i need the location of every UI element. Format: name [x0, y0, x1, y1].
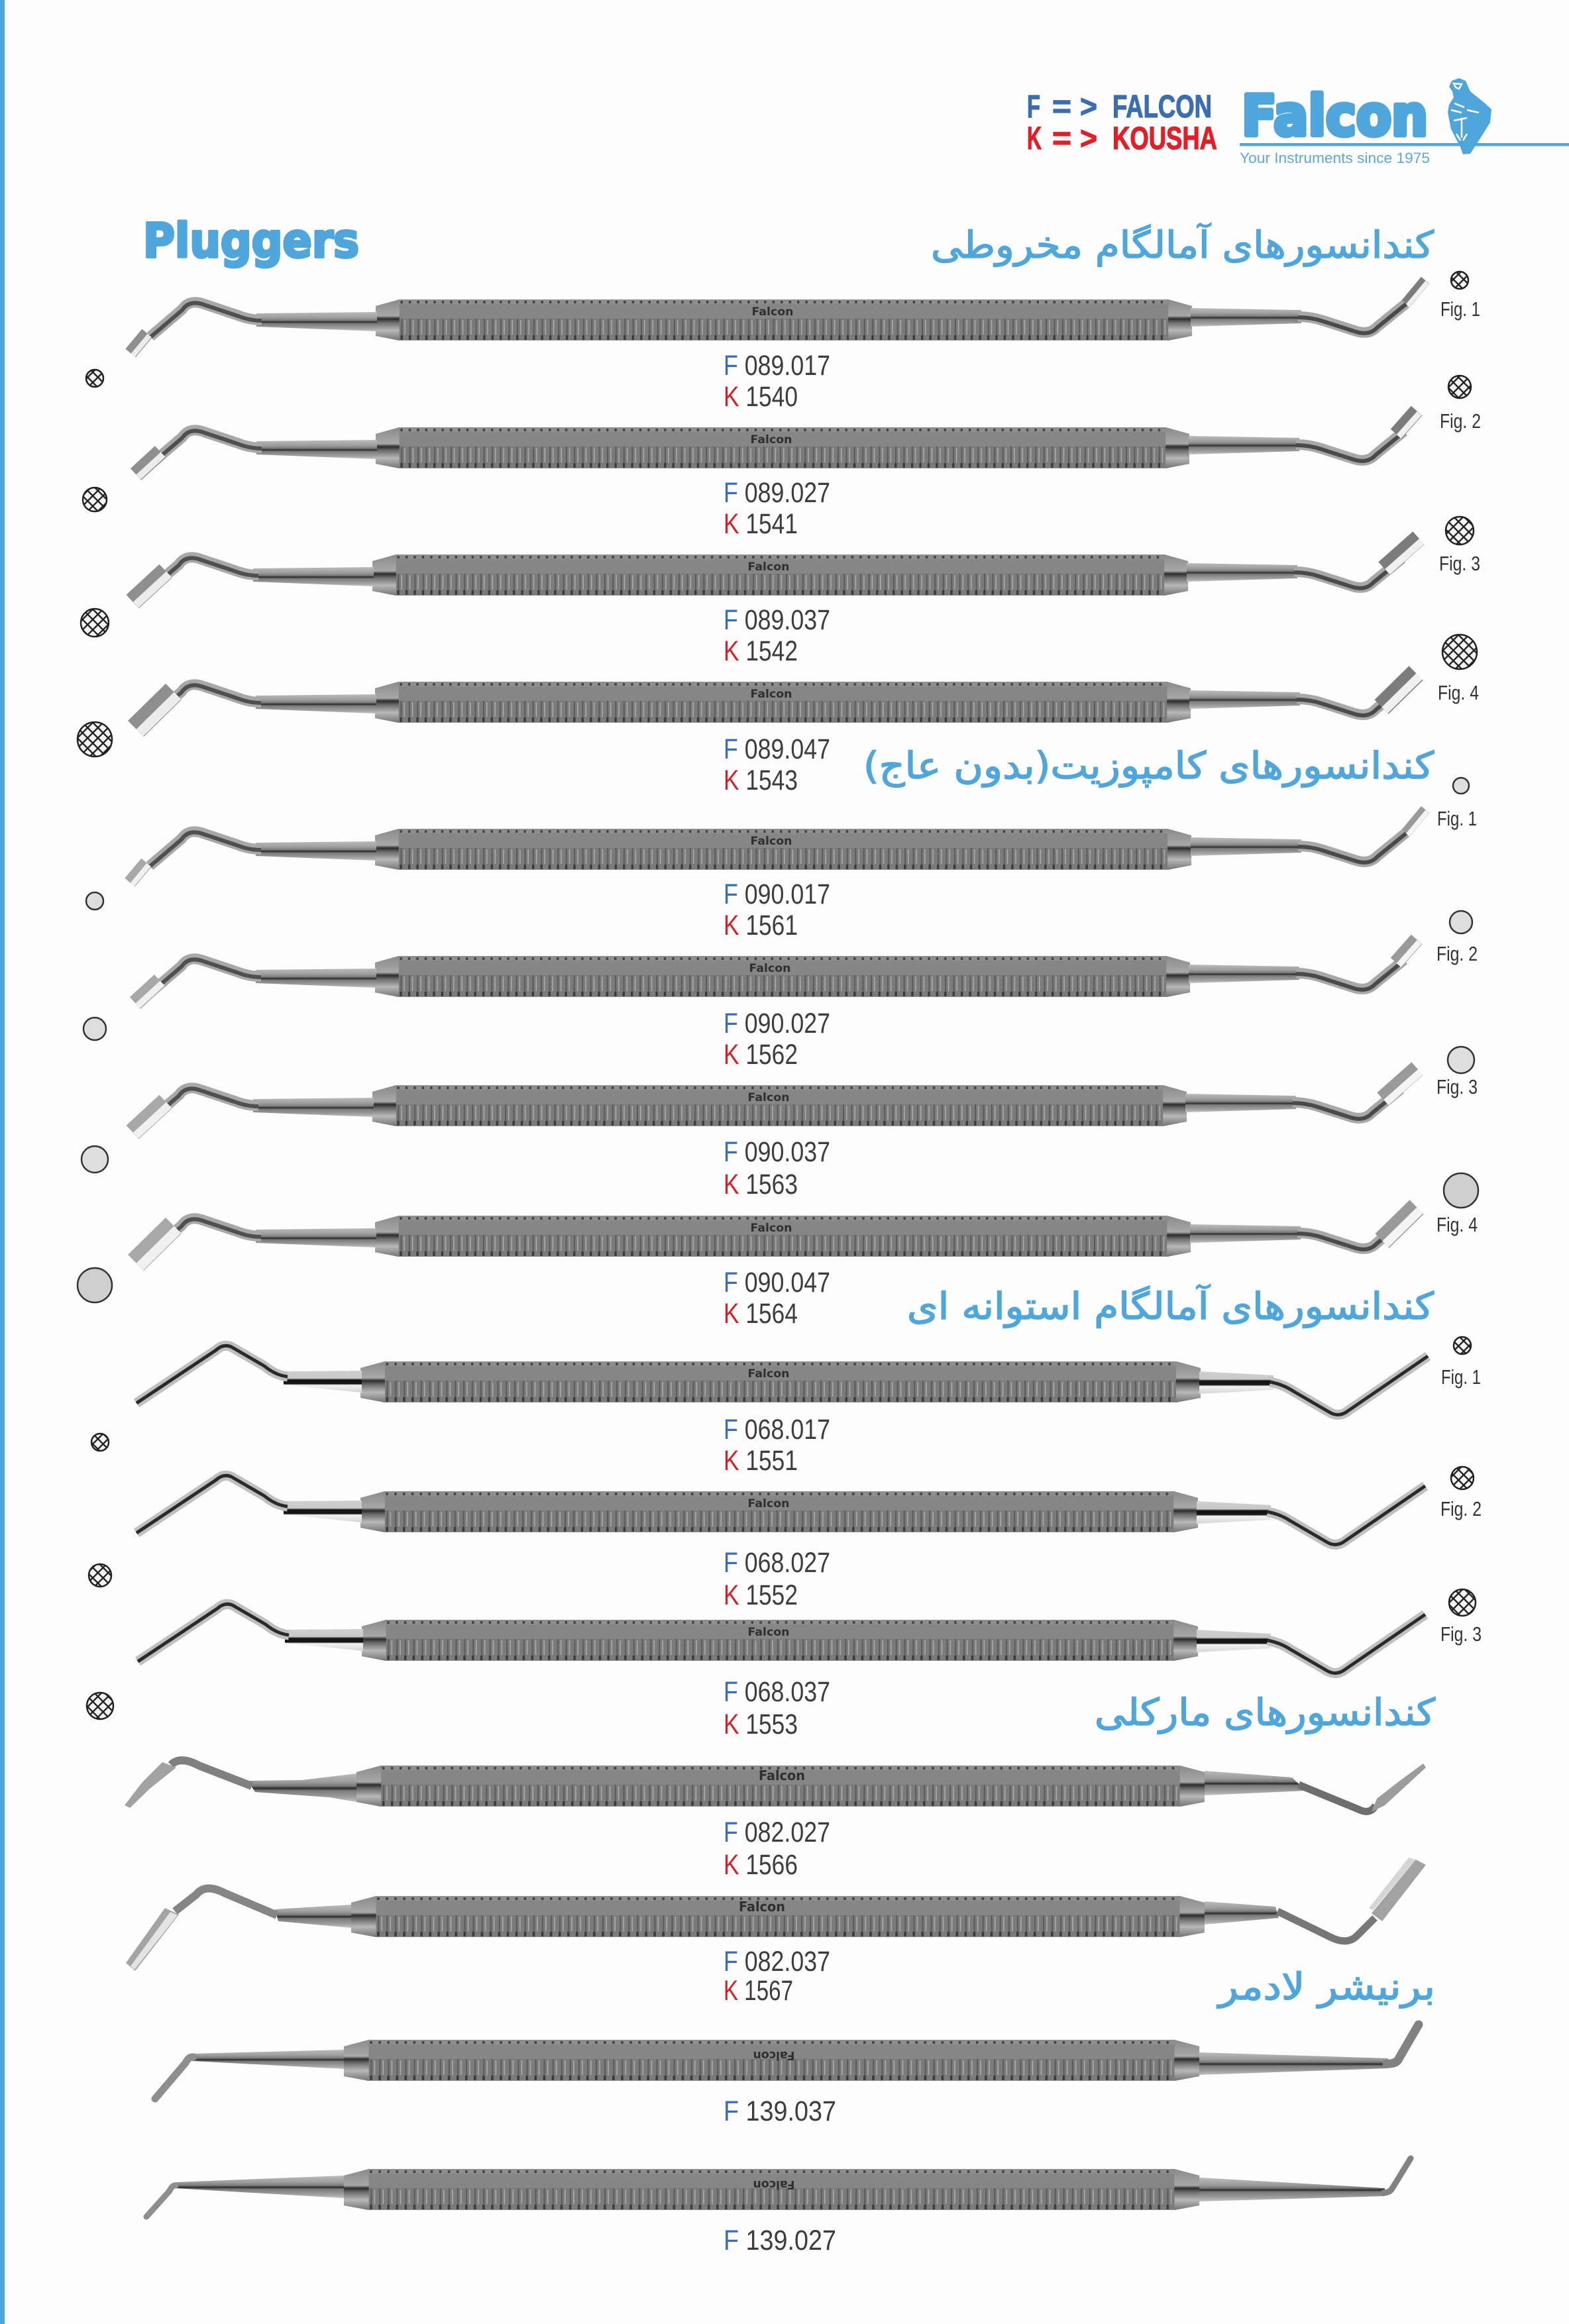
legend: F and K brand codes — [1027, 89, 1217, 156]
figures: right-hand amalgam tip faces and labels: Fig. 4 — [1438, 681, 1479, 704]
legend: F and K brand codes: K — [1027, 121, 1042, 156]
figures: right-hand amalgam tip faces and labels — [1438, 272, 1481, 704]
heading: conical amalgam condensers: کندانسورهای آمالگام مخروطی — [931, 223, 1434, 267]
instrument: 082.027 — [125, 1760, 1426, 1812]
instrument: 139.027: Falcon — [753, 2178, 795, 2192]
instrument: 089.017: Falcon — [751, 305, 794, 319]
instrument: 068.037 — [138, 1604, 1425, 1673]
code: 139.037: F 139.037 — [724, 2095, 836, 2127]
codes: 090.037 / 1563 — [724, 1136, 830, 1200]
instrument: 089.027: Falcon — [750, 433, 792, 447]
codes: 090.027 / 1562: K 1562 — [724, 1039, 798, 1071]
codes: 068.037 / 1553: K 1553 — [724, 1709, 798, 1740]
codes: 082.027 / 1566: F 082.027 — [724, 1817, 830, 1848]
codes: 089.037 / 1542: K 1542 — [724, 635, 798, 667]
codes: 068.037 / 1553: F 068.037 — [724, 1676, 830, 1708]
code: 139.027: F 139.027 — [724, 2225, 836, 2256]
codes: 090.047 / 1564 — [724, 1267, 830, 1330]
codes: 068.027 / 1552: F 068.027 — [724, 1547, 830, 1579]
figures: right-hand composite tip faces and labels — [1436, 778, 1478, 1236]
legend: F and K brand codes: FALCON — [1112, 89, 1212, 125]
codes: 089.047 / 1543 — [724, 733, 830, 796]
codes: 068.027 / 1552 — [724, 1547, 830, 1611]
codes: 090.037 / 1563: F 090.037 — [724, 1136, 830, 1168]
instrument: 090.017: Falcon — [750, 835, 792, 848]
title: Pluggers: Pluggers — [143, 213, 359, 268]
figures: right-hand composite tip faces and labels: Fig. 2 — [1436, 942, 1478, 965]
legend: F and K brand codes: = — [1052, 121, 1071, 156]
codes: 090.017 / 1561 — [724, 878, 830, 941]
figures: right-hand composite tip faces and labels: Fig. 4 — [1436, 1213, 1478, 1236]
instrument: 090.047: Falcon — [750, 1222, 792, 1235]
legend: F and K brand codes: = — [1052, 89, 1071, 125]
legend: F and K brand codes: KOUSHA — [1112, 121, 1217, 156]
figures: right-hand cylindrical tip faces and labels — [1440, 1337, 1482, 1646]
instrument: 082.027: Falcon — [759, 1768, 805, 1783]
instrument: 090.037 — [133, 1069, 1421, 1136]
logo: Falcon wordmark, bird and tagline: Your Instruments since 1975 — [1240, 150, 1430, 166]
instrument: 068.027 — [136, 1475, 1425, 1545]
heading: Markley condensers: کندانسورهای مارکلی — [1095, 1691, 1435, 1734]
figures: right-hand amalgam tip faces and labels: Fig. 2 — [1440, 409, 1481, 433]
figures: right-hand cylindrical tip faces and labels: Fig. 1 — [1441, 1365, 1481, 1389]
codes: 068.017 / 1551: K 1551 — [724, 1445, 798, 1477]
codes: 090.027 / 1562 — [724, 1008, 830, 1071]
codes: 082.037 / 1567 — [724, 1946, 830, 2007]
codes: 090.047 / 1564: F 090.047 — [724, 1267, 830, 1298]
codes: 090.047 / 1564: K 1564 — [724, 1298, 798, 1330]
instrument: 068.017 — [136, 1346, 1428, 1415]
logo: Falcon wordmark, bird and tagline — [1240, 78, 1569, 166]
codes: 090.027 / 1562: F 090.027 — [724, 1008, 830, 1039]
heading: cylindrical amalgam condensers: کندانسورهای آمالگام استوانه ای — [907, 1284, 1434, 1328]
codes: 089.017 / 1540: F 089.017 — [724, 350, 830, 382]
instrument: 089.047 — [136, 673, 1419, 733]
instrument: 082.037: Falcon — [739, 1899, 785, 1915]
figures: right-hand composite tip faces and labels: Fig. 3 — [1436, 1075, 1478, 1098]
codes: 068.037 / 1553 — [724, 1676, 830, 1740]
codes: 089.047 / 1543: F 089.047 — [724, 733, 830, 765]
heading: composite condensers: کندانسورهای کامپوزیت(بدون عاج) — [863, 745, 1434, 788]
instrument: 090.017 — [130, 810, 1427, 885]
instrument: 068.037: Falcon — [747, 1626, 790, 1639]
figures: right-hand composite tip faces and labels: Fig. 1 — [1437, 807, 1477, 830]
instrument: 089.017 — [131, 280, 1427, 355]
codes: 082.037 / 1567: K 1567 — [724, 1975, 793, 2007]
codes: 089.017 / 1540: K 1540 — [724, 381, 798, 413]
codes: 068.017 / 1551: F 068.017 — [724, 1414, 830, 1446]
codes: 089.027 / 1541 — [724, 477, 830, 540]
instrument: 068.017: Falcon — [747, 1367, 790, 1381]
codes: 068.027 / 1552: K 1552 — [724, 1579, 798, 1611]
codes: 082.027 / 1566 — [724, 1817, 830, 1881]
instrument: 139.037 — [155, 2025, 1419, 2099]
instrument: 082.037 — [126, 1858, 1426, 1971]
logo: Falcon wordmark, bird and tagline: Falcon — [1242, 83, 1428, 148]
instrument: 068.027: Falcon — [747, 1497, 790, 1510]
codes: 089.017 / 1540 — [724, 350, 830, 413]
codes: 090.017 / 1561: F 090.017 — [724, 878, 830, 910]
figures: left-hand tip faces — [78, 370, 113, 1719]
legend: F and K brand codes: > — [1080, 121, 1097, 156]
legend: F and K brand codes: > — [1080, 89, 1097, 125]
instrument: 090.027: Falcon — [749, 962, 791, 975]
figures: right-hand amalgam tip faces and labels: Fig. 1 — [1440, 297, 1480, 321]
instrument: 089.037 — [133, 538, 1422, 605]
instrument: 090.037: Falcon — [747, 1091, 790, 1104]
codes: 089.027 / 1541: K 1541 — [724, 508, 798, 540]
instrument: 089.037: Falcon — [747, 560, 790, 574]
codes: 082.037 / 1567: F 082.037 — [724, 1946, 830, 1978]
codes: 089.037 / 1542 — [724, 604, 830, 667]
instrument: 090.047 — [136, 1207, 1420, 1267]
left accent strip — [0, 0, 5, 2324]
codes: 090.017 / 1561: K 1561 — [724, 910, 798, 941]
instrument: 139.037: Falcon — [753, 2048, 795, 2062]
heading: Ladmore burnisher: برنیشر لادمر — [1217, 1966, 1435, 2009]
figures: right-hand amalgam tip faces and labels: Fig. 3 — [1439, 552, 1480, 575]
legend: F and K brand codes: F — [1027, 89, 1040, 125]
figures: right-hand cylindrical tip faces and labels: Fig. 2 — [1440, 1497, 1482, 1520]
instrument: 090.027 — [135, 939, 1419, 1006]
instrument: 089.047: Falcon — [750, 688, 792, 701]
codes: 089.027 / 1541: F 089.027 — [724, 477, 830, 509]
codes: 089.037 / 1542: F 089.037 — [724, 604, 830, 636]
instrument: 089.027 — [136, 411, 1419, 477]
codes: 090.037 / 1563: K 1563 — [724, 1169, 798, 1200]
codes: 082.027 / 1566: K 1566 — [724, 1849, 798, 1881]
codes: 068.017 / 1551 — [724, 1414, 830, 1477]
figures: right-hand cylindrical tip faces and labels: Fig. 3 — [1440, 1622, 1482, 1646]
codes: 089.047 / 1543: K 1543 — [724, 765, 798, 796]
instrument: 139.027 — [146, 2158, 1411, 2217]
